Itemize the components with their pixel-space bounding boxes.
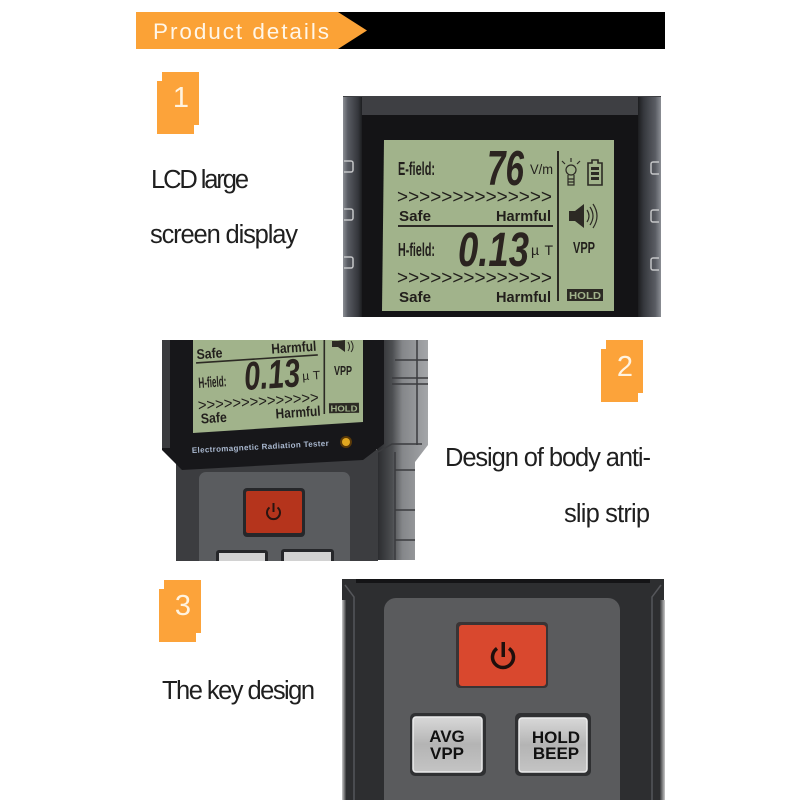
lcd display 2: 0.13 [243,351,301,399]
lcd display 1: 0.13 [458,224,529,277]
partial key left [216,550,268,561]
lcd display 1: >>>>>>>>>>>>>> [397,268,552,289]
HOLD BEEP key: HOLD [532,728,580,747]
HOLD BEEP key: BEEP [533,744,579,763]
black screen bezel [162,340,384,470]
lcd display 1: E-field: [398,159,435,179]
lcd display 2: Safe [200,409,227,426]
panel 2: device body with anti-slip strip [162,338,428,572]
lcd display 2: H-field: [198,373,227,392]
lcd display 2: µT [302,368,321,383]
badge 2 [601,340,643,402]
model caption: Electromagnetic Radiation Tester [192,439,329,455]
label: Design of body anti-slip strip: slip strip [564,500,650,528]
lcd display 2: Harmful [271,338,317,357]
lcd display 2: HOLD [330,404,358,414]
lcd display 1: Harmful [496,289,551,306]
lcd display 1: µT [531,242,553,258]
lcd display 1: Safe [399,289,431,306]
lcd display 1 [382,140,614,311]
icon: HOLD tag: HOLD [569,290,601,302]
icon: speaker [569,204,597,228]
badge 2: 2 [617,351,633,383]
right grip [377,340,428,560]
HOLD BEEP key [515,713,591,776]
lcd display 1: Harmful [496,208,551,225]
lcd display 2 [193,338,363,433]
power button [243,488,305,537]
lcd display 1: VPP [573,240,595,257]
label: Design of body anti-slip strip [445,444,651,528]
label: The key design: The key design [162,677,315,705]
header banner [136,12,665,49]
AVG VPP key [410,713,486,776]
badge 1: 1 [173,82,189,114]
lcd display 1: >>>>>>>>>>>>>> [397,187,552,208]
grey key panel [384,598,620,800]
badge 1 [157,72,199,134]
lcd display 1: Safe [399,208,431,225]
label: LCD large screen display: LCD large [151,166,249,194]
panel 1: LCD screen close-up [343,96,661,317]
icon: bulb [562,158,580,185]
label: LCD large screen display [150,166,298,249]
AVG VPP key: VPP [430,744,464,763]
lower grey body [176,450,378,561]
badge 3 [159,580,201,642]
badge 3: 3 [175,590,191,622]
lcd display 1: H-field: [398,240,435,260]
grey key panel [199,472,350,561]
header banner: Product details [153,19,329,44]
label: Design of body anti-slip strip: Design of body anti- [445,444,651,472]
indicator LED [340,436,352,448]
lcd display 1: 76 [487,142,524,196]
AVG VPP key: AVG [429,727,465,746]
panel 3: key close-up [342,579,665,800]
lcd display 2: Harmful [275,403,321,422]
partial key right: HOLD [291,560,323,572]
lcd display 2: VPP [334,363,352,378]
lcd display 2: Safe [196,344,223,362]
label: LCD large screen display: screen display [150,221,298,249]
icon: battery [588,160,602,185]
partial key right [281,549,334,561]
lcd display 1: V/m [530,161,553,177]
lcd display 2: >>>>>>>>>>>>>> [197,390,319,415]
power button [456,622,548,688]
